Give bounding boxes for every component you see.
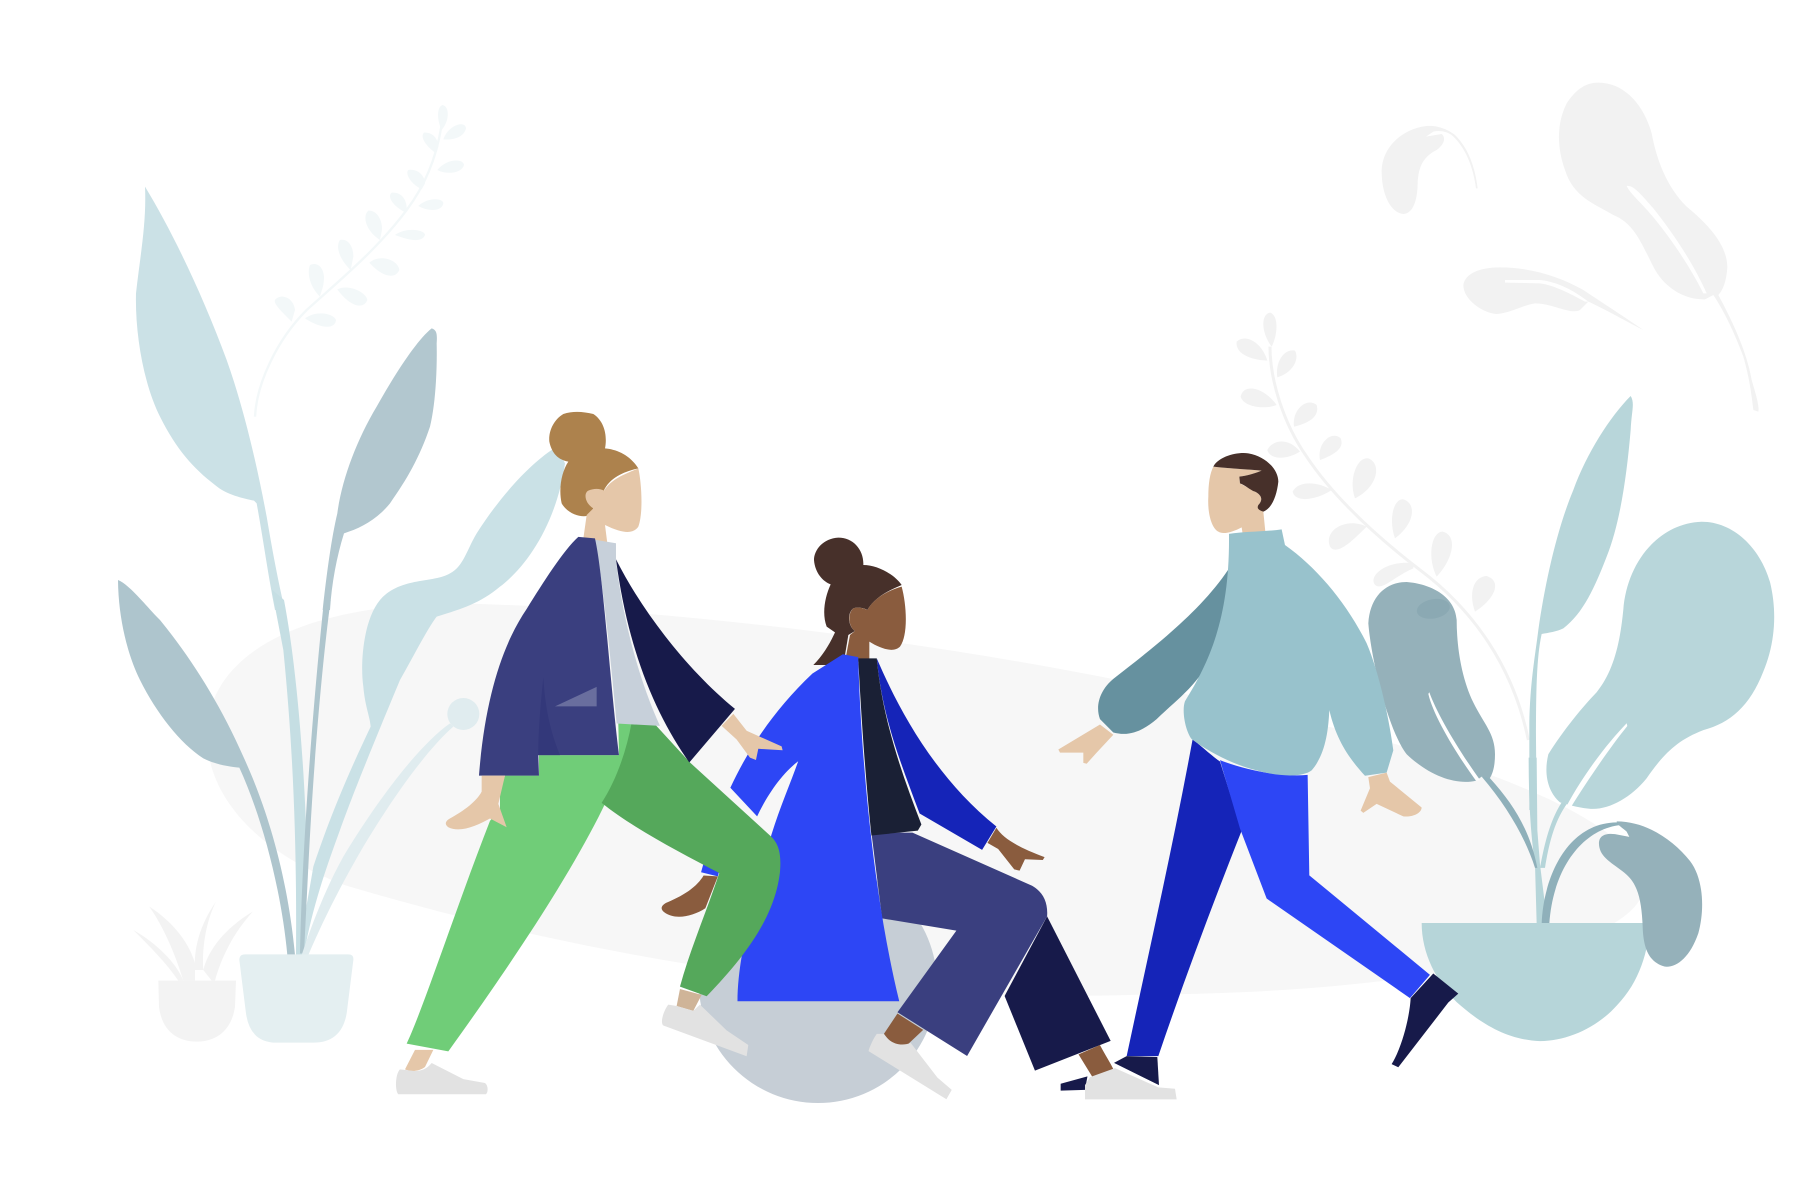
jacket pocket <box>555 687 597 706</box>
tall teal leaf <box>1529 396 1633 810</box>
center stem <box>1529 758 1547 924</box>
far hand <box>987 828 1045 871</box>
slate leaf, right <box>323 328 437 610</box>
left plant upper group <box>136 105 565 953</box>
dark leaf stem <box>1482 777 1537 868</box>
grey leaf, horizontal <box>1463 267 1643 330</box>
bud <box>447 698 479 730</box>
jacket fold shadow <box>538 677 560 755</box>
far sleeve <box>877 658 996 850</box>
large leaf vein <box>1627 186 1707 293</box>
large teal leaf <box>1546 522 1774 809</box>
far hand <box>722 714 783 760</box>
wavy leaf <box>299 447 565 953</box>
faint branch, left <box>255 105 466 417</box>
bud stem <box>302 723 453 955</box>
blue coat <box>730 654 899 1001</box>
head: hair and face <box>813 538 906 665</box>
tall pale leaf <box>136 187 285 610</box>
body <box>396 537 783 1094</box>
dark leaf vein <box>1428 692 1480 781</box>
dark far sleeve <box>616 559 735 762</box>
navy jacket <box>479 537 619 776</box>
small grey plant <box>133 902 253 1042</box>
far trouser leg <box>1127 739 1242 1056</box>
curled leaf stem <box>1542 822 1627 924</box>
grey branch, right <box>1237 313 1528 740</box>
person: walking man in teal sweater <box>1058 453 1458 1099</box>
near hand <box>1361 773 1422 817</box>
near trouser leg <box>871 833 1047 1056</box>
near trouser leg <box>1220 760 1430 998</box>
person: woman in green trousers <box>396 412 783 1094</box>
right plant lower group <box>1368 522 1774 1041</box>
grey ball seat <box>699 865 937 1103</box>
far hand <box>1058 724 1113 764</box>
dark teal leaf <box>1368 582 1495 782</box>
grey leaf, large <box>1559 83 1759 412</box>
grey leaf, small <box>1382 126 1478 214</box>
back shoe <box>662 1005 748 1056</box>
dark top <box>858 658 921 836</box>
left plant lower group <box>118 580 479 1043</box>
far trouser leg <box>1005 916 1111 1071</box>
sweater <box>1184 529 1393 776</box>
top right grey leaves <box>1382 83 1759 412</box>
dark green trouser leg <box>602 723 780 996</box>
far shoe heel <box>1061 1076 1087 1091</box>
slate leaf, left <box>118 580 295 955</box>
large leaf vein <box>1567 723 1627 808</box>
slate leaf stem <box>300 600 331 953</box>
background blob <box>207 603 1644 996</box>
front ankle <box>405 1050 433 1071</box>
near hand <box>446 776 507 829</box>
light green trouser leg <box>407 723 633 1051</box>
near shoe <box>869 1034 952 1099</box>
dark leaf spot <box>1415 596 1451 621</box>
pale leaf stem <box>272 589 307 955</box>
person: seated woman in blue coat <box>662 538 1114 1099</box>
grey shirt <box>595 540 660 726</box>
front shoe <box>396 1063 488 1094</box>
head: face and hair <box>1208 453 1278 538</box>
teal bowl pot <box>1422 923 1650 1041</box>
far arm sleeve <box>1098 570 1228 734</box>
right plant upper group <box>1237 313 1633 810</box>
back ankle <box>677 989 702 1011</box>
front shoe upper <box>1114 1056 1159 1085</box>
near hand <box>662 876 718 917</box>
body <box>662 654 1114 1099</box>
near ankle <box>884 1014 923 1045</box>
far ankle <box>1079 1045 1114 1078</box>
near cuff <box>701 863 720 876</box>
white shoe <box>1085 1068 1177 1099</box>
curled dark leaf <box>1599 821 1702 967</box>
horizontal leaf vein <box>1505 280 1588 302</box>
body <box>1058 529 1458 1099</box>
pale pot <box>239 954 353 1043</box>
head: hair and face <box>549 412 641 543</box>
large leaf stem <box>1540 802 1567 868</box>
back shoe <box>1392 974 1458 1067</box>
